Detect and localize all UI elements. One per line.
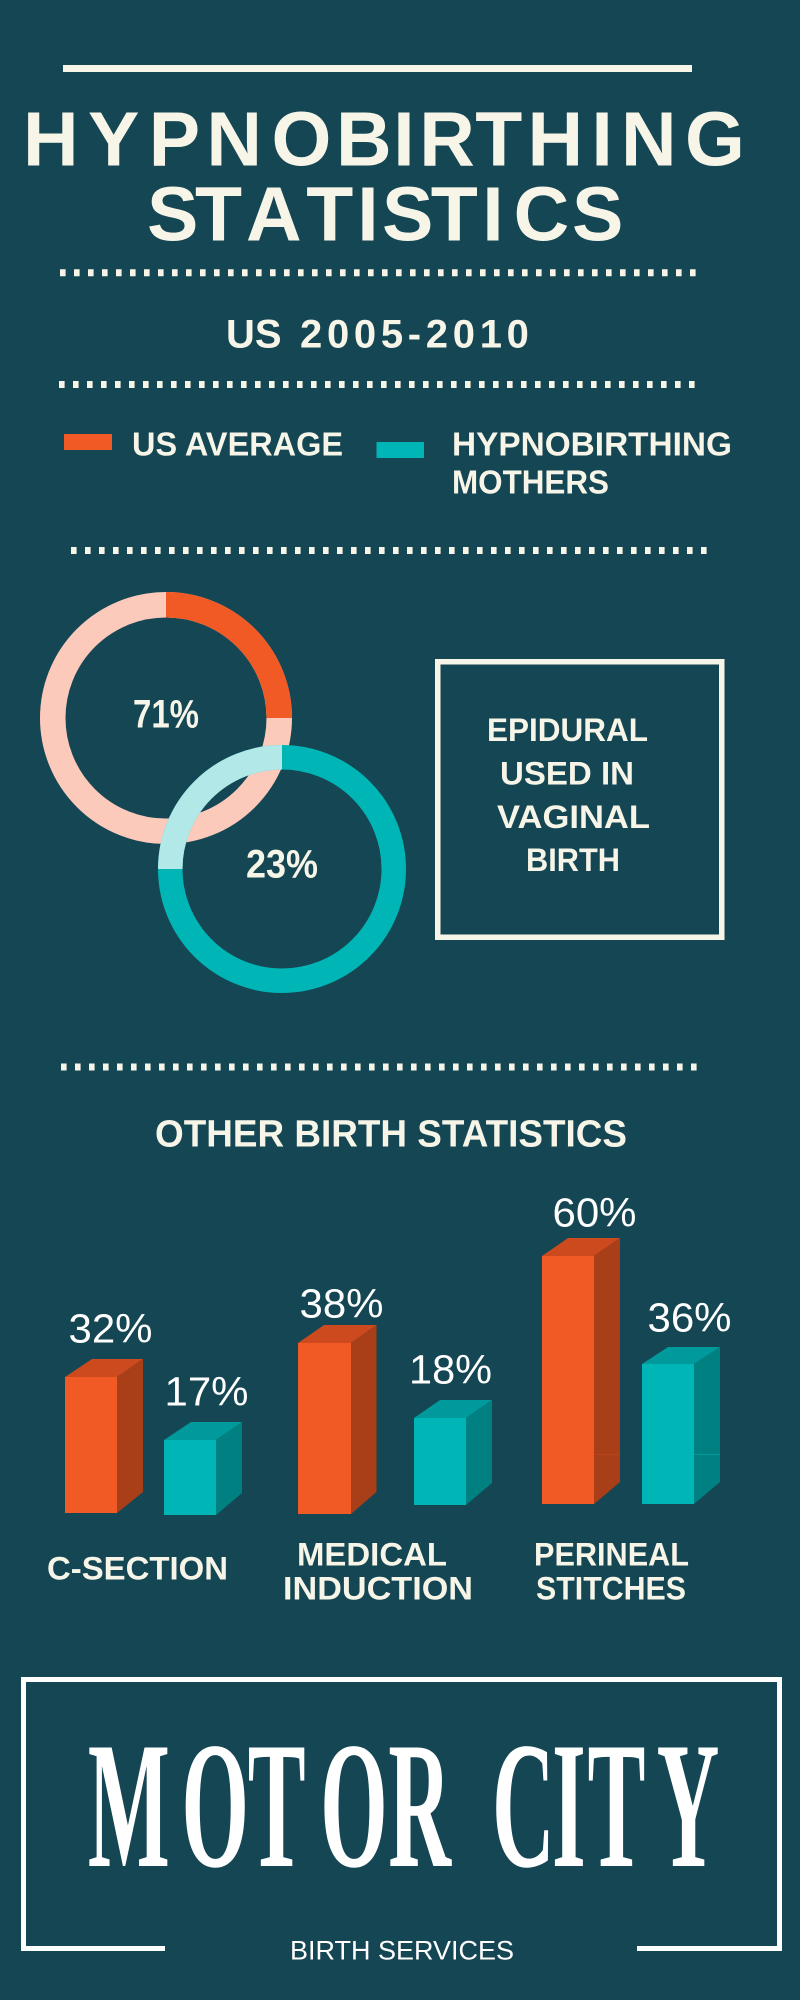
title [23,96,745,258]
callout: epidural: USED IN [500,756,634,792]
legend: us average: US AVERAGE [132,426,343,464]
donut: us average 71%: 71% [133,692,199,736]
legend: hypnobirthing mothers: HYPNOBIRTHING [452,426,732,464]
bar: c-section us average 32% [65,1306,152,1513]
donut: us average 71% [53,605,279,831]
bar chart [47,1190,732,1606]
subtitle: US [226,312,282,356]
bar: stitches hypnobirthing 36%: 36% [648,1294,732,1340]
label: c-section: C-SECTION [47,1550,228,1586]
bar: stitches us average 60% [542,1190,636,1504]
bar: induction us average 38%: 38% [300,1280,384,1326]
header [23,65,745,384]
bar: induction hypnobirthing 18% [409,1346,492,1505]
logo subtitle: BIRTH SERVICES [290,1936,514,1966]
callout: epidural: EPIDURAL [487,712,648,748]
bar: stitches us average 60%: 60% [552,1190,636,1236]
heading: other birth statistics: OTHER BIRTH STATISTICS [155,1114,627,1156]
label: medical induction: MEDICAL [297,1536,447,1572]
bar: c-section us average 32%: 32% [68,1306,152,1352]
subtitle: 2005-2010 [300,312,534,356]
donut: hypnobirthing 23%: 23% [246,842,318,886]
label: perineal stitches: PERINEAL [534,1536,689,1572]
bar: c-section hypnobirthing 17% [164,1368,248,1515]
title: STATISTICS [147,172,623,258]
label: medical induction [283,1536,473,1606]
label: perineal stitches: STITCHES [536,1570,686,1606]
label: medical induction: INDUCTION [283,1570,473,1606]
bar: stitches hypnobirthing 36% [642,1294,732,1504]
logo name: MOTOR CITY [88,1704,719,1906]
title: HYPNOBIRTHING [23,96,745,182]
bar: induction hypnobirthing 18%: 18% [409,1346,492,1392]
legend: hypnobirthing mothers: MOTHERS [452,464,609,502]
callout: epidural [438,662,722,937]
legend [64,426,732,502]
callout: epidural: BIRTH [526,842,620,878]
callout: epidural: VAGINAL [497,799,650,835]
donut: hypnobirthing 23% [170,757,394,981]
footer logo [24,1680,780,1966]
bar: c-section hypnobirthing 17%: 17% [164,1368,248,1414]
legend: hypnobirthing mothers [376,426,732,502]
bar: induction us average 38% [298,1280,384,1514]
label: perineal stitches [534,1536,689,1606]
